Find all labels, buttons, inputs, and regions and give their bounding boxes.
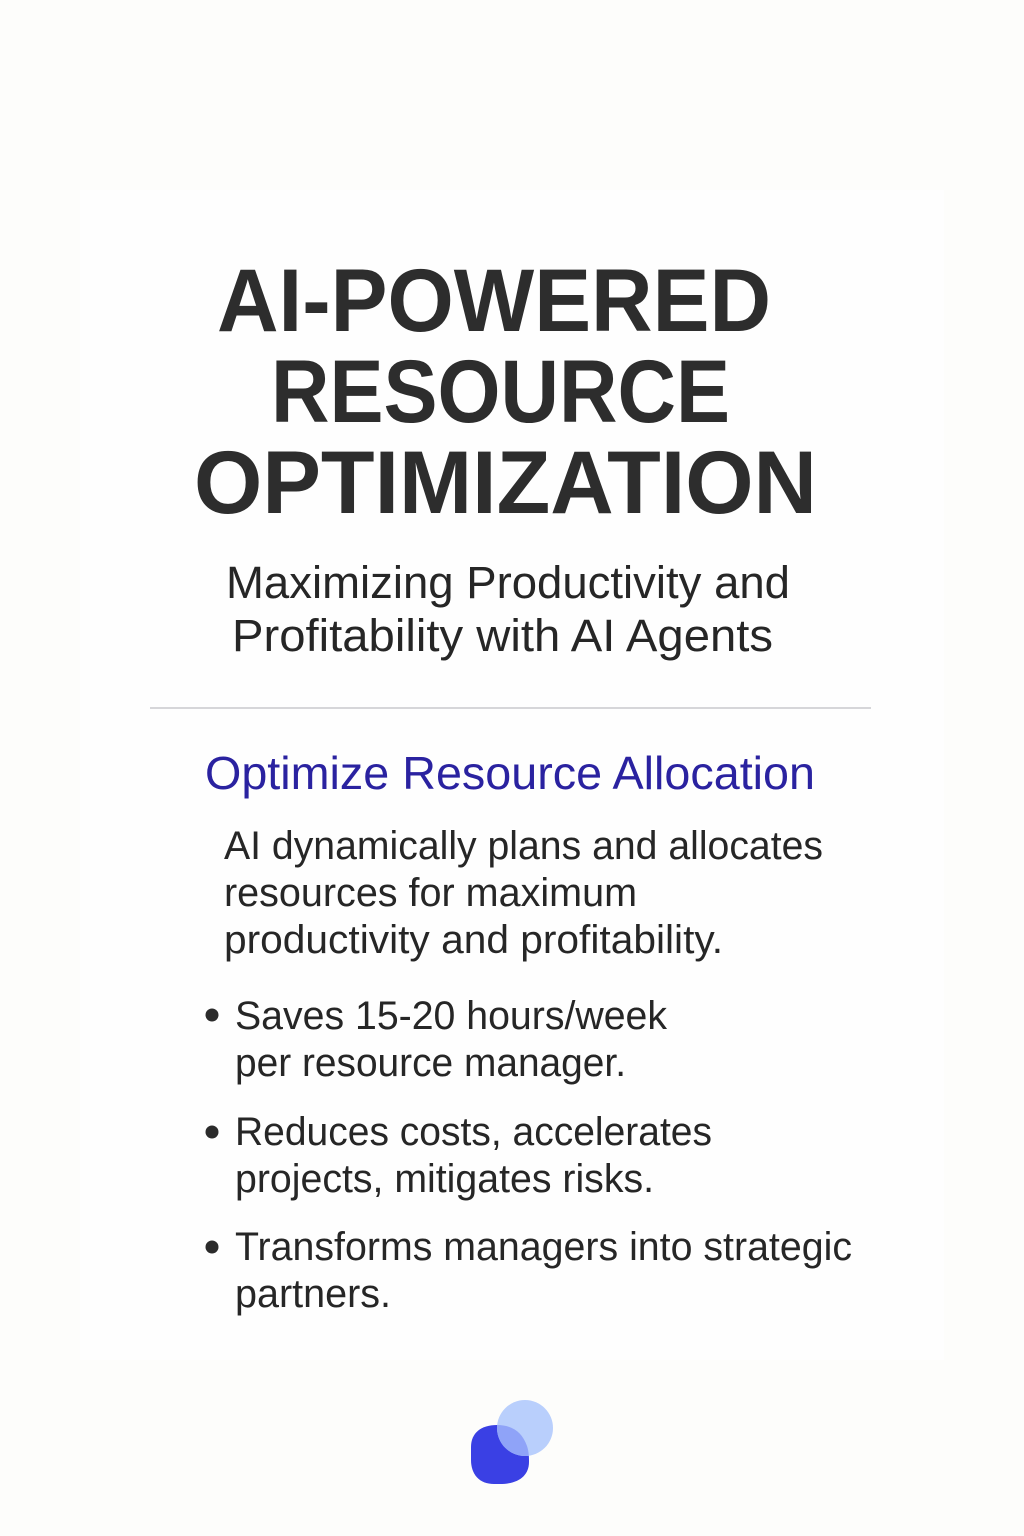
bullet: time saved <box>206 994 668 1085</box>
description paragraph: resources for maximum <box>224 871 637 915</box>
bullet: strategic partners: partners. <box>235 1272 391 1316</box>
bullet: cost reduction <box>206 1110 712 1201</box>
bullet: cost reduction: Reduces costs, accelerates <box>235 1110 712 1154</box>
title <box>194 250 817 532</box>
description paragraph: productivity and profitability. <box>224 918 723 962</box>
bullet: time saved: per resource manager. <box>235 1041 626 1085</box>
bullet: time saved: Saves 15-20 hours/week <box>235 994 668 1038</box>
title: RESOURCE <box>271 341 730 441</box>
section heading: Optimize Resource Allocation <box>205 747 815 799</box>
bullet: cost reduction: projects, mitigates risks. <box>235 1157 654 1201</box>
subtitle: Profitability with AI Agents <box>232 610 773 661</box>
title: OPTIMIZATION <box>194 432 817 532</box>
title: AI-POWERED <box>217 250 771 350</box>
icon: logo <box>471 1400 553 1484</box>
bullet: strategic partners: Transforms managers into strategic <box>235 1225 852 1269</box>
description paragraph: AI dynamically plans and allocates <box>224 824 823 868</box>
description paragraph <box>224 824 823 962</box>
bullet: strategic partners <box>206 1225 852 1316</box>
subtitle: Maximizing Productivity and <box>226 557 790 608</box>
subtitle <box>226 557 790 661</box>
